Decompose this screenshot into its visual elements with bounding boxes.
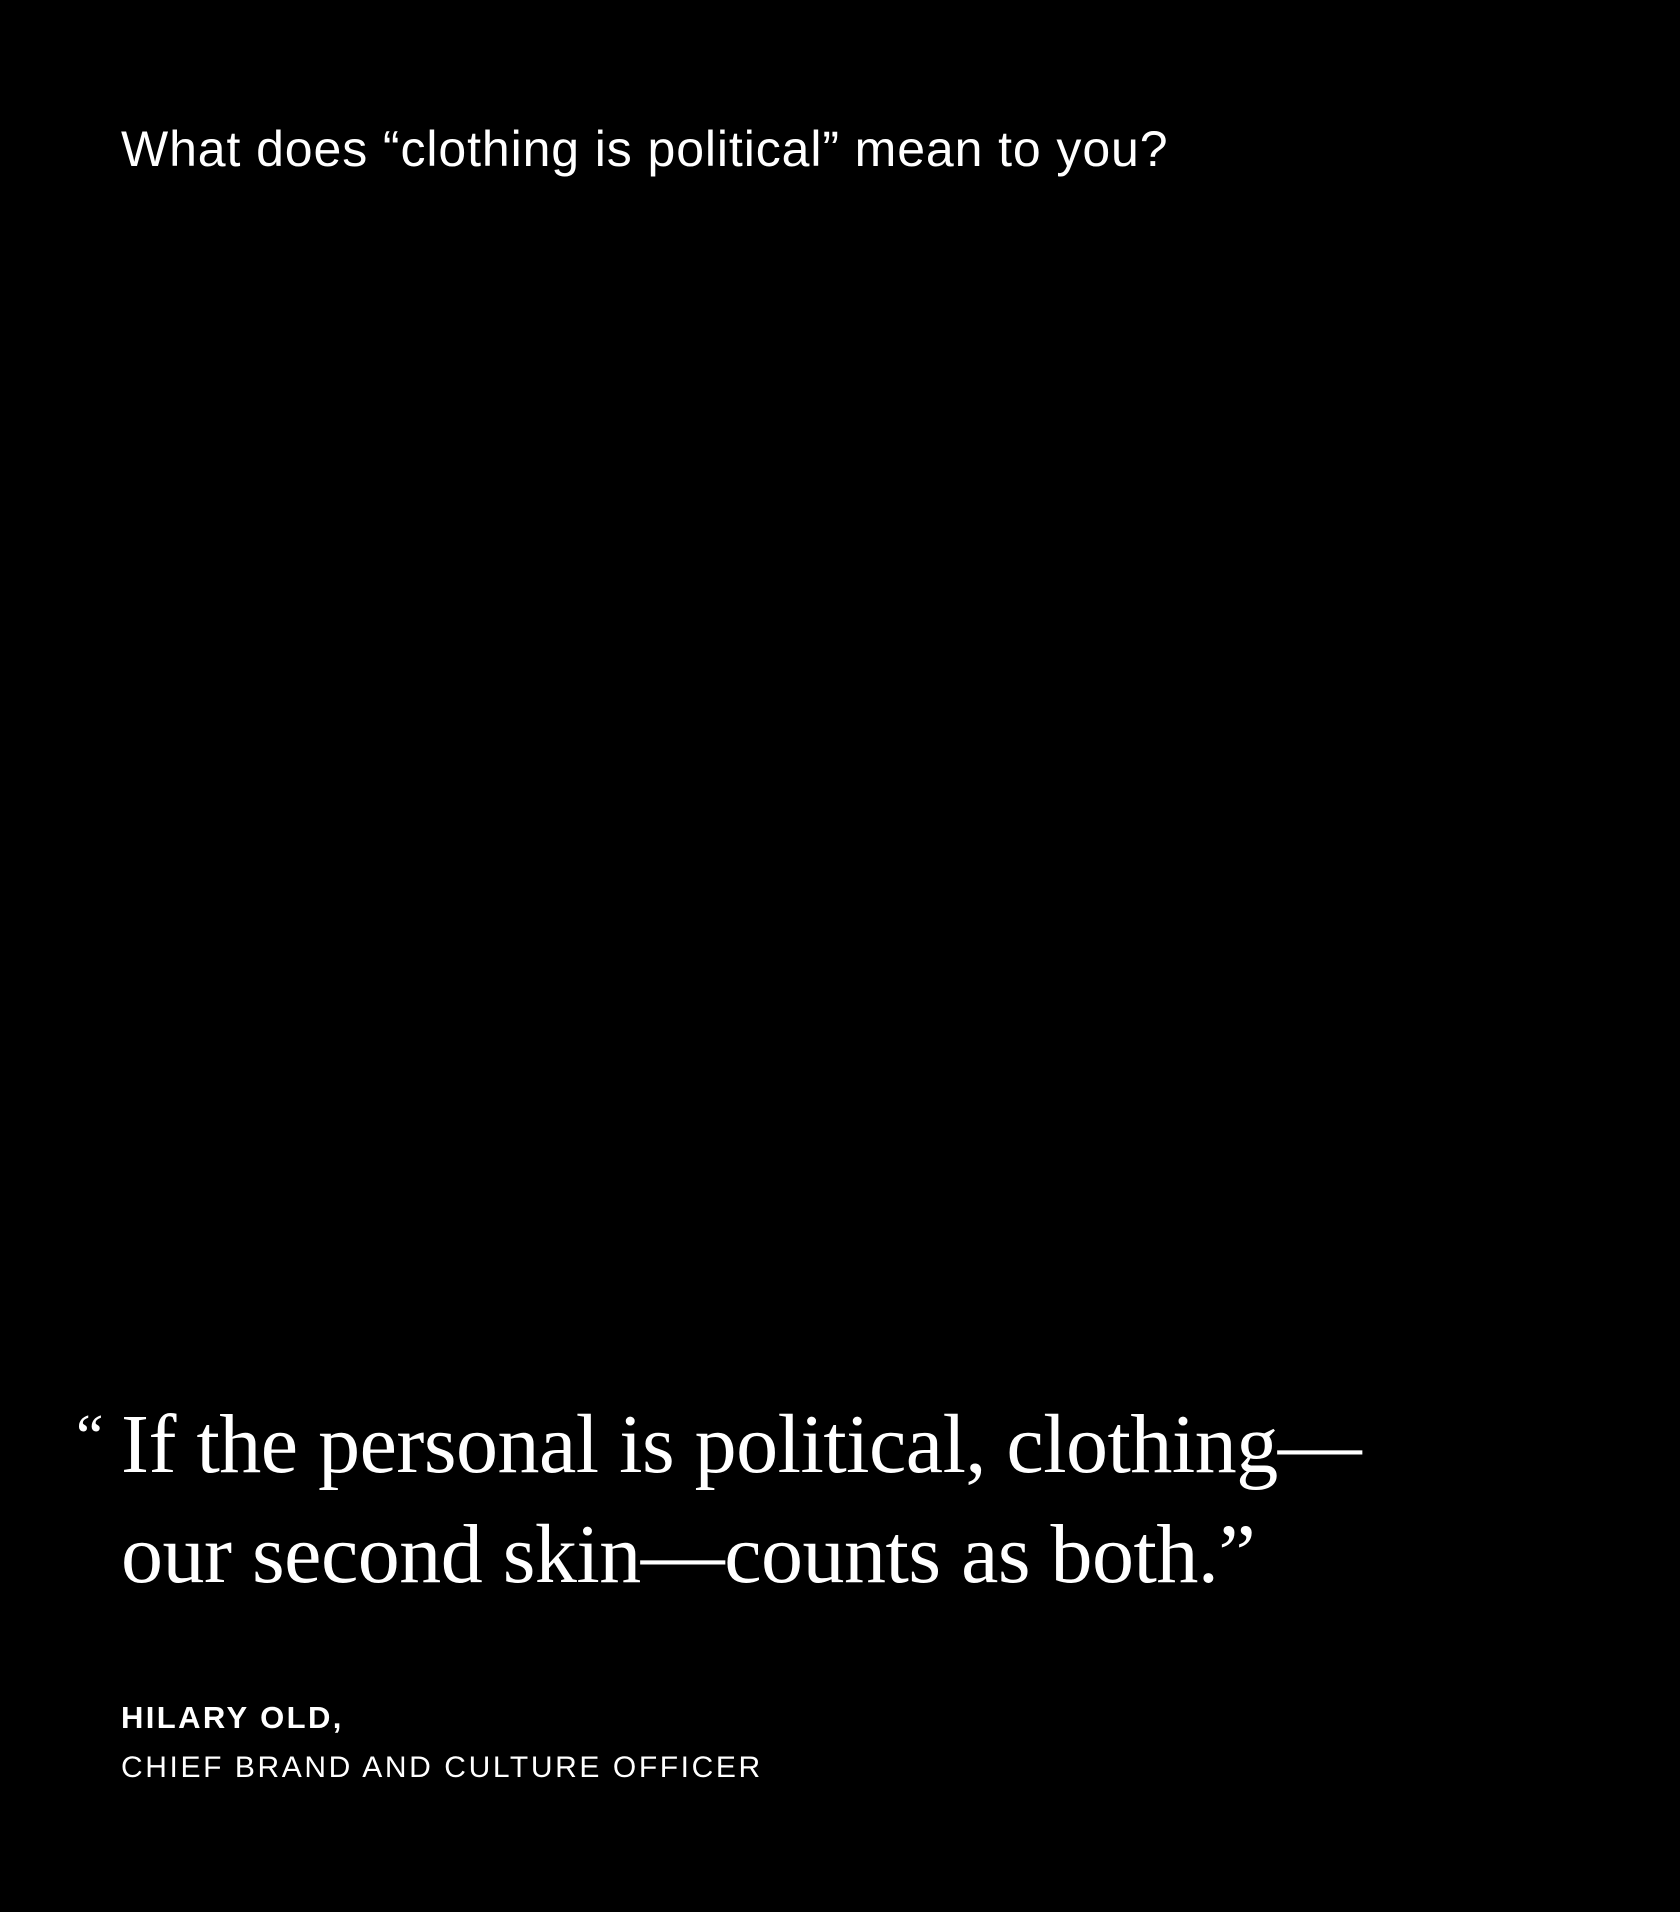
attribution name: HILARY OLD, — [121, 1700, 344, 1735]
pull quote: “ — [76, 1403, 103, 1471]
pull quote: If the personal is political, clothing— — [121, 1398, 1361, 1491]
pull quote — [76, 1398, 1362, 1601]
question heading: What does “clothing is political” mean to you? — [121, 121, 1168, 177]
pull quote: our second skin—counts as both.” — [121, 1508, 1255, 1601]
attribution title: CHIEF BRAND AND CULTURE OFFICER — [121, 1751, 763, 1784]
